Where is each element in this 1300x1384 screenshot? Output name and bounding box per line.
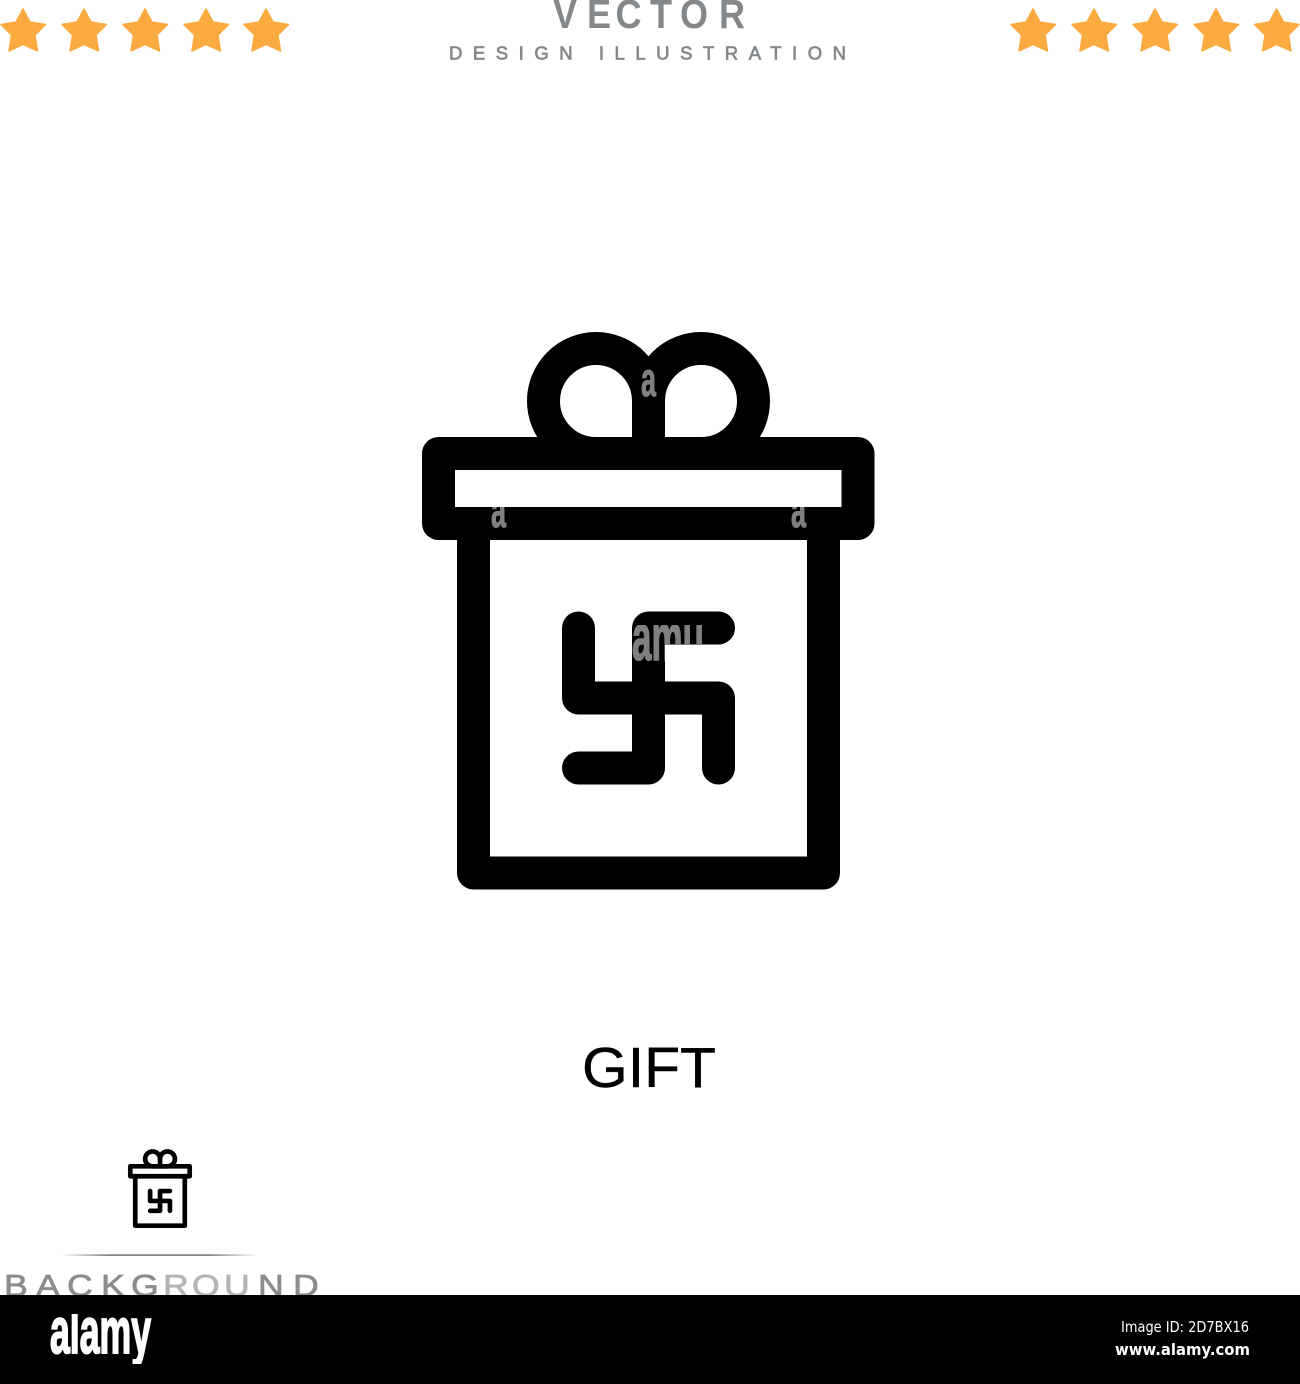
icon: gift box (large) (438, 348, 858, 873)
watermark: lid letter right: a (791, 485, 806, 538)
footer bar (0, 1295, 1300, 1384)
logo: alamy: alamy (50, 1295, 151, 1367)
star rating: left (1, 9, 288, 51)
watermark: lid letter left: a (491, 485, 506, 538)
title: GIFT: GIFT (582, 1036, 716, 1099)
gift box body (474, 524, 824, 873)
icon: gift box (small) (130, 1151, 190, 1226)
symbol on box (578, 628, 718, 768)
watermark: bow letter: a (641, 354, 656, 407)
subheading: DESIGN ILLUSTRATION: DESIGN ILLUSTRATION (449, 42, 846, 64)
image id: Image ID: 2D7BX16 (1121, 1318, 1249, 1336)
gift lid (438, 454, 858, 524)
label: BACKGROUND: BACKGROU ND (4, 1269, 319, 1303)
website: www.alamy.com (1115, 1340, 1250, 1359)
star rating: right (1011, 9, 1299, 51)
gift bow (544, 348, 754, 454)
watermark: centre letters: amu (632, 600, 704, 674)
divider line (60, 1254, 258, 1256)
